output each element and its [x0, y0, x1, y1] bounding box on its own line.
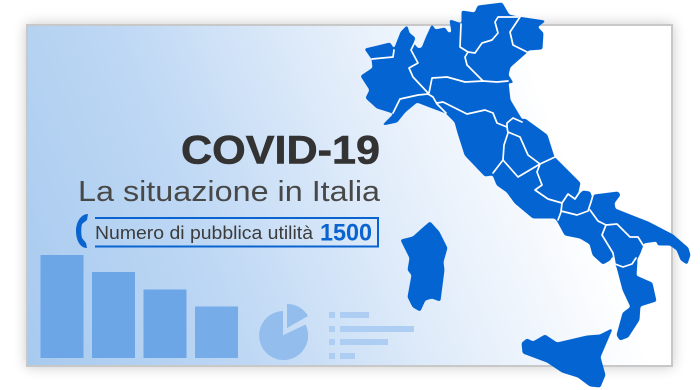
- callout number: 1500: [320, 220, 372, 246]
- callout: public utility number box: [95, 218, 378, 246]
- pie chart icon: [259, 304, 308, 360]
- title: COVID-19: [181, 128, 380, 172]
- map of Italy: [361, 3, 690, 387]
- Sardinia: [401, 222, 447, 311]
- regional borders: [372, 17, 643, 267]
- bar chart: [40, 255, 238, 358]
- callout label: Numero di pubblica utilità: [95, 222, 314, 243]
- legend list icon: [329, 312, 414, 359]
- subtitle: La situazione in Italia: [78, 176, 381, 208]
- Sicily: [522, 329, 612, 387]
- land silhouettes: [361, 3, 690, 387]
- mainland: [361, 3, 690, 340]
- icon: telephone handset: [76, 214, 88, 248]
